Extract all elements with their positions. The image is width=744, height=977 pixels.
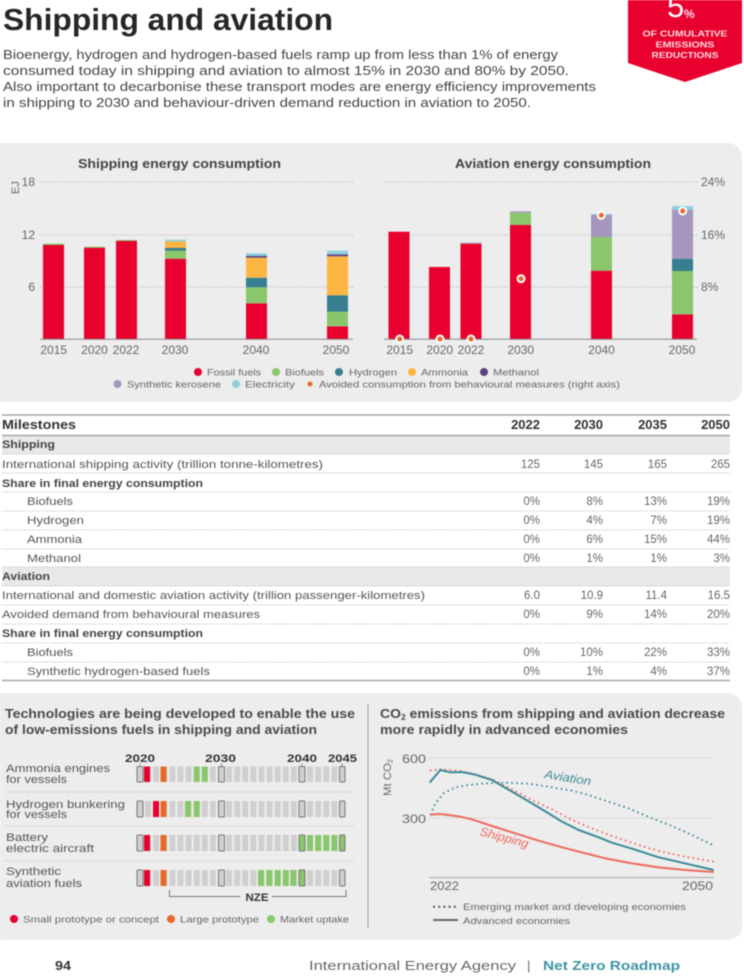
legend: technology stages: Market uptake <box>280 914 349 926</box>
row labels: Biofuels <box>27 496 74 508</box>
badge: 5% of cumulative emissions reductions: % <box>684 7 695 21</box>
line: shipping advanced economies <box>430 814 714 872</box>
intro text: Bioenergy, hydrogen and hydrogen-based fuels ramp up from less than 1% of energy <box>3 47 559 62</box>
legend: technology stages: Small prototype or concept <box>23 914 159 926</box>
legend: energy carriers: Ammonia <box>421 368 469 378</box>
row labels: Share in final energy consumption <box>2 628 203 640</box>
table values: 1% <box>586 553 603 565</box>
row: synthetic aviation fuels: Synthetic <box>6 866 62 878</box>
bar chart: shipping: 2030 <box>162 343 189 357</box>
legend: economies: Advanced economies <box>463 916 570 927</box>
heading: aviation chart: Aviation energy consumption <box>455 156 651 171</box>
table values: 19% <box>707 515 730 527</box>
bar chart: shipping: EJ <box>10 181 22 194</box>
row: ammonia engines: Ammonia engines <box>6 763 111 775</box>
table values: 22% <box>644 647 667 659</box>
table values: 145 <box>584 459 603 471</box>
table: milestones <box>2 415 730 680</box>
bar chart: shipping: 2020 <box>81 343 108 357</box>
table values: 6.0 <box>524 590 540 602</box>
row labels: Methanol <box>27 553 81 565</box>
footer: publisher <box>309 958 680 973</box>
table values: 10% <box>580 647 603 659</box>
table values: 20% <box>707 609 730 621</box>
row: battery electric aircraft: Battery <box>6 832 49 844</box>
line chart: CO2 emissions: 300 <box>402 812 426 826</box>
line chart: CO2 emissions: 2050 <box>682 879 713 893</box>
bracket: NZE <box>170 890 346 904</box>
label: shipping: Shipping <box>478 824 530 851</box>
line chart: CO2 emissions: Mt CO <box>382 764 394 796</box>
table values: 4% <box>650 666 667 678</box>
badge: 5% of cumulative emissions reductions: EMISSIONS <box>656 40 715 50</box>
line: shipping emerging economies <box>430 769 714 862</box>
panel: technologies and CO2 emissions <box>0 693 742 940</box>
table values: 15% <box>644 534 667 546</box>
table values: 0% <box>523 666 540 678</box>
heading: CO2 emissions: CO <box>380 706 400 721</box>
row labels: International shipping activity (trillion tonne-kilometres) <box>2 459 323 471</box>
intro text: in shipping to 2030 and behaviour-driven demand reduction in aviation to 2050. <box>3 95 531 110</box>
row labels: Biofuels <box>27 647 74 659</box>
intro text: consumed today in shipping and aviation to almost 15% in 2030 and 80% by 2050. <box>3 63 569 78</box>
row: ammonia engines: for vessels <box>6 774 68 786</box>
table values: 33% <box>707 647 730 659</box>
bar chart: aviation: 2020 <box>426 343 453 357</box>
bracket: NZE: NZE <box>246 892 268 904</box>
legend: energy carriers: Electricity <box>245 380 295 390</box>
row labels: Aviation <box>2 571 50 583</box>
table header <box>2 417 730 432</box>
table values: 44% <box>707 534 730 546</box>
line: aviation advanced economies <box>430 770 714 870</box>
heading: CO2 emissions: emissions from shipping and aviation decrease <box>406 706 725 721</box>
line chart: CO2 emissions <box>382 752 714 927</box>
intro text <box>3 47 597 110</box>
table values: 37% <box>707 666 730 678</box>
line chart: CO2 emissions: 2022 <box>430 879 459 893</box>
table values: 11.4 <box>645 590 668 602</box>
badge: 5% of cumulative emissions reductions <box>628 0 742 82</box>
bar chart: aviation: 24% <box>701 175 725 189</box>
bar chart: shipping: 6 <box>28 280 35 294</box>
bar chart: shipping <box>10 175 353 357</box>
label: aviation: Aviation <box>542 767 592 788</box>
row labels: Ammonia <box>27 534 83 546</box>
legend: energy carriers: Hydrogen <box>349 368 397 378</box>
table values: 6% <box>586 534 603 546</box>
footer: publisher: Net Zero Roadmap <box>543 958 680 973</box>
table values: 1% <box>586 666 603 678</box>
table values: 0% <box>523 647 540 659</box>
legend: technology stages <box>10 914 349 926</box>
footer: publisher: International Energy Agency <box>309 958 517 973</box>
table values: 16.5 <box>708 590 730 602</box>
bar chart: shipping: 2022 <box>113 343 140 357</box>
timeline: technology readiness: 2040 <box>287 753 317 765</box>
line chart: CO2 emissions: 600 <box>402 752 426 766</box>
row: battery electric aircraft: electric aircraft <box>6 843 94 855</box>
table values: 125 <box>521 459 540 471</box>
row: ammonia engines <box>6 763 345 786</box>
row labels: Hydrogen <box>27 515 84 527</box>
bar chart: aviation: 8% <box>701 280 719 294</box>
timeline: technology readiness: 2020 <box>125 753 155 765</box>
table values: 165 <box>648 459 667 471</box>
panel: energy consumption charts <box>0 143 742 402</box>
row labels: International and domestic aviation activity (trillion passenger-kilometres) <box>2 590 425 602</box>
table values: 13% <box>644 496 667 508</box>
row: synthetic aviation fuels <box>6 866 345 890</box>
table values: 265 <box>711 459 730 471</box>
heading: shipping chart: Shipping energy consumption <box>78 156 281 171</box>
bar chart: aviation: 16% <box>701 228 725 242</box>
bar chart: aviation <box>384 175 725 357</box>
heading: technologies: Technologies are being developed to enable the use <box>5 706 355 721</box>
row labels: Avoided demand from behavioural measures <box>2 609 261 621</box>
table values: 0% <box>523 515 540 527</box>
table header: 2035 <box>638 417 667 432</box>
page number: 94 <box>55 958 72 973</box>
row labels <box>2 439 425 678</box>
table header: 2022 <box>511 417 540 432</box>
intro text: Also important to decarbonise these transport modes are energy efficiency improvements <box>3 79 597 94</box>
row: battery electric aircraft <box>6 832 345 855</box>
bar chart: shipping: 18 <box>22 175 35 189</box>
heading: CO2 emissions <box>380 706 725 737</box>
bar chart: shipping: 2015 <box>40 343 67 357</box>
heading: technologies <box>5 706 355 737</box>
table values: 10.9 <box>581 590 603 602</box>
table values: 7% <box>650 515 667 527</box>
badge: 5% of cumulative emissions reductions: OF CUMULATIVE <box>642 28 728 38</box>
badge: 5% of cumulative emissions reductions: REDUCTIONS <box>652 50 719 60</box>
legend: economies: Emerging market and developing economies <box>463 902 686 913</box>
row labels: Synthetic hydrogen-based fuels <box>27 666 211 678</box>
line: aviation emerging economies <box>430 783 712 845</box>
bar chart: shipping: 2040 <box>243 343 270 357</box>
bar chart: aviation: 2030 <box>507 343 534 357</box>
legend: energy carriers: Fossil fuels <box>207 368 261 378</box>
table values: 1% <box>650 553 667 565</box>
table values: 9% <box>586 609 603 621</box>
table header: 2030 <box>574 417 603 432</box>
legend: energy carriers: Methanol <box>493 368 539 378</box>
bar chart: shipping: 2050 <box>323 343 350 357</box>
row: synthetic aviation fuels: aviation fuels <box>6 878 83 890</box>
table values: 0% <box>523 553 540 565</box>
table values: 8% <box>586 496 603 508</box>
table values: 0% <box>523 496 540 508</box>
bar chart: shipping: 12 <box>22 228 35 242</box>
legend: technology stages: Large prototype <box>180 914 259 926</box>
timeline: technology readiness: 2030 <box>205 753 236 765</box>
title: Shipping and aviation <box>3 2 333 37</box>
legend: energy carriers: Synthetic kerosene <box>127 380 221 390</box>
table values <box>521 459 730 678</box>
table values: 0% <box>523 534 540 546</box>
table values: 19% <box>707 496 730 508</box>
row: hydrogen bunkering <box>6 799 345 821</box>
table values: 0% <box>523 609 540 621</box>
footer: publisher: | <box>527 958 530 973</box>
heading: CO2 emissions: more rapidly in advanced economies <box>380 722 628 737</box>
table values: 3% <box>713 553 730 565</box>
table header: Milestones <box>2 417 76 432</box>
table header: 2050 <box>701 417 730 432</box>
row: hydrogen bunkering: Hydrogen bunkering <box>6 799 125 811</box>
legend: energy carriers: Biofuels <box>285 368 324 378</box>
heading: technologies: of low-emissions fuels in shipping and aviation <box>5 722 317 737</box>
line chart: CO2 emissions: 2 <box>388 759 394 763</box>
table values: 4% <box>586 515 603 527</box>
timeline: technology readiness <box>5 753 357 926</box>
bar chart: aviation: 2050 <box>669 343 696 357</box>
row labels: Share in final energy consumption <box>2 478 203 490</box>
bar chart: aviation: 2022 <box>458 343 485 357</box>
row: hydrogen bunkering: for vessels <box>6 809 68 821</box>
timeline: technology readiness: 2045 <box>328 753 357 765</box>
row labels: Shipping <box>2 439 55 451</box>
legend: energy carriers <box>114 368 620 390</box>
legend: energy carriers: Avoided consumption from behavioural measures (right axis) <box>319 380 620 390</box>
bar chart: aviation: 2040 <box>588 343 615 357</box>
table values: 14% <box>644 609 667 621</box>
bar chart: aviation: 2015 <box>386 343 413 357</box>
legend: economies <box>433 902 686 927</box>
heading: CO2 emissions: 2 <box>401 713 406 722</box>
